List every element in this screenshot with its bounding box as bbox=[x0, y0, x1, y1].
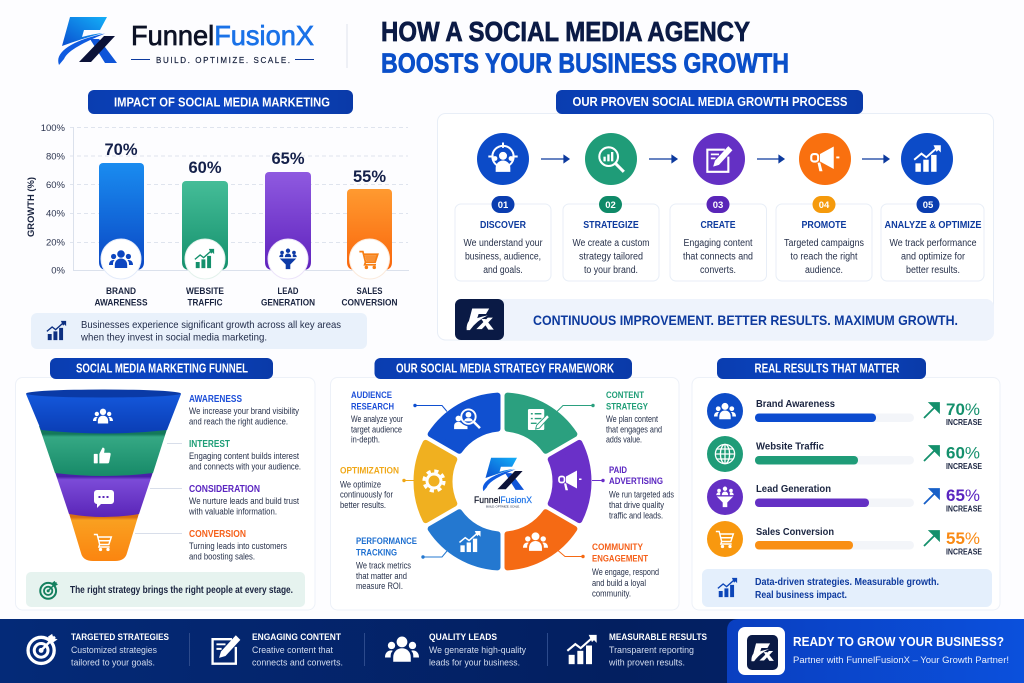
footer bar bbox=[0, 619, 1024, 683]
stage text: interest bbox=[189, 439, 301, 472]
ring segment: community engagement bbox=[508, 512, 574, 567]
step 03: create bbox=[670, 133, 766, 281]
label: content strategy: CONTENT bbox=[606, 390, 644, 401]
label: community engagement: community. bbox=[592, 588, 631, 598]
label: content strategy: We plan content bbox=[606, 414, 658, 424]
label: performance tracking: PERFORMANCE bbox=[356, 536, 417, 547]
bar: sales conversion 55% bbox=[342, 168, 398, 308]
callout: chart summary: Businesses experience significant growth across all key areas bbox=[81, 319, 341, 331]
funnel stage 1: awareness shape bbox=[26, 394, 181, 434]
bar: lead generation 65%: GENERATION bbox=[261, 298, 315, 308]
title: BOOSTS YOUR BUSINESS GROWTH bbox=[381, 48, 789, 78]
label: audience research: RESEARCH bbox=[351, 402, 394, 412]
stage text: awareness: We increase your brand visibility bbox=[189, 406, 299, 416]
bar: website traffic 60%: 60% bbox=[188, 159, 222, 177]
y axis labels: 60% bbox=[46, 180, 66, 191]
label: optimization bbox=[340, 466, 399, 510]
callout: data-driven strategies: Data-driven strategies. Measurable growth. bbox=[755, 577, 939, 588]
step 02: strategize: STRATEGIZE bbox=[583, 219, 639, 231]
label: content strategy bbox=[606, 390, 662, 444]
heading: strategy framework: OUR SOCIAL MEDIA STRATEGY FRAMEWORK bbox=[396, 362, 614, 376]
arrow: strategize to create bbox=[649, 156, 677, 162]
bar: brand awareness 70%: BRAND bbox=[106, 286, 136, 296]
step 02: strategize: to your brand. bbox=[584, 265, 638, 276]
heading: growth process: OUR PROVEN SOCIAL MEDIA GROWTH PROCESS bbox=[572, 95, 848, 109]
bar: brand awareness 70% bbox=[94, 141, 148, 308]
icon: shopping cart bbox=[94, 534, 111, 551]
step 02: strategize: We create a custom bbox=[572, 238, 650, 249]
banner: continuous improvement: CONTINUOUS IMPROVEMENT. BETTER RESULTS. MAXIMUM GROWTH. bbox=[533, 312, 958, 328]
label: community engagement bbox=[592, 542, 659, 598]
ring segment: content strategy bbox=[508, 396, 574, 451]
step 03: create: Engaging content bbox=[684, 238, 753, 249]
heading: real results: REAL RESULTS THAT MATTER bbox=[754, 362, 900, 376]
call to action: Partner with FunnelFusionX – Your Growth Partner! bbox=[793, 655, 1009, 666]
callout: data-driven strategies: Real business impact. bbox=[755, 590, 847, 601]
center logo: BUILD. OPTIMIZE. SCALE. bbox=[486, 504, 520, 508]
step 02: strategize: 02 bbox=[605, 200, 616, 211]
stage text: interest: and connects with your audience. bbox=[189, 462, 301, 472]
label: paid advertising: PAID bbox=[609, 465, 627, 476]
bar: website traffic 60% bbox=[182, 159, 228, 308]
y axis labels: 40% bbox=[46, 208, 66, 220]
stage text: interest: INTEREST bbox=[189, 439, 230, 450]
label: audience research bbox=[351, 390, 403, 444]
label: optimization: continuously for bbox=[340, 490, 393, 500]
bar: lead generation 65%: LEAD bbox=[278, 286, 299, 296]
ring segment: audience research bbox=[431, 396, 498, 451]
arrow: discover to strategize bbox=[541, 156, 569, 162]
stage text: conversion bbox=[189, 529, 287, 562]
title bbox=[381, 16, 789, 78]
label: paid advertising: that drive quality bbox=[609, 500, 664, 510]
result row: lead generation: INCREASE bbox=[946, 504, 983, 514]
result row: sales conversion: INCREASE bbox=[946, 548, 983, 556]
step 01: discover: 01 bbox=[498, 200, 509, 211]
step 01: discover: DISCOVER bbox=[480, 219, 526, 231]
step 04: promote: audience. bbox=[805, 265, 843, 276]
result row: sales conversion: 55% bbox=[946, 529, 980, 548]
bar: sales conversion 55%: CONVERSION bbox=[342, 298, 398, 308]
step 05: analyze and optimize: better results. bbox=[906, 265, 960, 276]
benefit: measurable results: Transparent reporting bbox=[609, 645, 694, 655]
label: community engagement: and build a loyal bbox=[592, 578, 646, 588]
benefit: targeted strategies bbox=[28, 632, 169, 668]
result row: brand awareness: Brand Awareness bbox=[756, 399, 835, 410]
callout: right strategy bbox=[26, 572, 305, 607]
label: optimization: better results. bbox=[340, 500, 386, 510]
step 03: create: 03 bbox=[713, 200, 723, 211]
callout: chart summary bbox=[31, 313, 367, 349]
connector lines bbox=[404, 406, 603, 557]
ring segment: performance tracking bbox=[431, 512, 498, 567]
bar: website traffic 60%: TRAFFIC bbox=[188, 298, 223, 308]
ring segment: optimization bbox=[416, 443, 454, 520]
call to action: READY TO GROW YOUR BUSINESS? bbox=[793, 635, 1004, 649]
step 01: discover: We understand your bbox=[464, 238, 543, 249]
step 04: promote: 04 bbox=[819, 200, 830, 211]
result row: website traffic bbox=[707, 436, 983, 472]
y axis labels: 0% bbox=[51, 266, 66, 276]
label: paid advertising: We run targeted ads bbox=[609, 490, 674, 500]
bar chart: growth by area bbox=[26, 123, 409, 308]
label: community engagement: We engage, respond bbox=[592, 567, 659, 577]
step 03: create: CREATE bbox=[700, 219, 736, 231]
heading: marketing funnel: SOCIAL MEDIA MARKETING FUNNEL bbox=[76, 362, 248, 376]
result row: sales conversion: Sales Conversion bbox=[756, 527, 834, 538]
ring segment: paid advertising bbox=[551, 443, 589, 520]
stage text: interest: Engaging content builds interest bbox=[189, 451, 299, 461]
brand tagline: BUILD. OPTIMIZE. SCALE. bbox=[156, 56, 290, 65]
call to action bbox=[727, 619, 1024, 683]
panel: growth process bbox=[438, 114, 994, 340]
step 04: promote bbox=[776, 133, 872, 281]
label: audience research: target audience bbox=[351, 424, 402, 434]
y axis labels: 20% bbox=[46, 238, 66, 248]
brand name: FunnelFusionX bbox=[131, 20, 314, 51]
benefit: engaging content bbox=[213, 632, 343, 668]
funnel stage 4: conversion shape bbox=[68, 510, 140, 561]
bar: brand awareness 70%: AWARENESS bbox=[94, 298, 148, 308]
step 04: promote: to reach the right bbox=[790, 252, 858, 262]
result row: website traffic: 60% bbox=[946, 444, 980, 462]
label: content strategy: that engages and bbox=[606, 424, 662, 434]
label: content strategy: adds value. bbox=[606, 434, 642, 444]
heading: marketing funnel bbox=[50, 358, 273, 379]
step 03: create: that connects and bbox=[683, 252, 753, 262]
result row: lead generation: 65% bbox=[946, 486, 980, 505]
step 01: discover bbox=[455, 133, 551, 281]
result row: brand awareness: INCREASE bbox=[946, 418, 983, 427]
benefit: quality leads: leads for your business. bbox=[429, 658, 520, 668]
step 05: analyze and optimize: ANALYZE & OPTIMIZE bbox=[884, 219, 982, 231]
label: performance tracking: measure ROI. bbox=[356, 581, 403, 591]
benefit: targeted strategies: Customized strategies bbox=[71, 645, 157, 655]
benefit: measurable results: with proven results. bbox=[608, 658, 685, 668]
stage text: consideration bbox=[188, 484, 299, 516]
icon: audience bbox=[93, 409, 113, 424]
step 02: strategize bbox=[563, 133, 659, 281]
stage text: conversion: and boosting sales. bbox=[189, 552, 255, 562]
benefit: engaging content: connects and converts. bbox=[252, 658, 343, 668]
result row: website traffic: Website Traffic bbox=[756, 442, 824, 452]
callout: right strategy: The right strategy brings the right people at every stage. bbox=[70, 585, 293, 596]
label: audience research: AUDIENCE bbox=[351, 390, 392, 401]
benefit: measurable results bbox=[567, 632, 707, 668]
panel: strategy framework bbox=[330, 378, 679, 610]
label: audience research: We analyze your bbox=[351, 414, 403, 424]
label: content strategy: STRATEGY bbox=[606, 402, 649, 412]
icon: FX logo mark bbox=[58, 17, 117, 65]
step 01: discover: and goals. bbox=[483, 265, 523, 276]
bar: sales conversion 55%: SALES bbox=[356, 286, 382, 296]
label: performance tracking: TRACKING bbox=[356, 548, 397, 558]
step 01: discover: business, audience, bbox=[465, 252, 541, 262]
funnel stage 3: consideration shape bbox=[54, 469, 154, 517]
banner: continuous improvement bbox=[455, 299, 994, 340]
bar: website traffic 60%: WEBSITE bbox=[186, 286, 224, 296]
arrow: promote to analyze bbox=[862, 156, 889, 162]
result row: brand awareness: 70% bbox=[946, 400, 980, 419]
benefit: measurable results: MEASURABLE RESULTS bbox=[609, 632, 707, 642]
benefit: targeted strategies: tailored to your goals. bbox=[71, 658, 155, 668]
funnel stage 2: interest shape bbox=[39, 426, 168, 476]
bar: lead generation 65% bbox=[261, 150, 315, 308]
icon: thumbs up bbox=[94, 448, 111, 463]
stage text: consideration: We nurture leads and build trust bbox=[189, 496, 299, 506]
bar: sales conversion 55%: 55% bbox=[353, 168, 386, 186]
panel: marketing funnel bbox=[16, 378, 315, 610]
label: community engagement: COMMUNITY bbox=[592, 542, 644, 553]
label: audience research: in-depth. bbox=[351, 434, 380, 444]
step 05: analyze and optimize bbox=[881, 133, 984, 281]
stage text: awareness bbox=[189, 394, 299, 426]
panel: real results bbox=[692, 378, 1000, 610]
bar: lead generation 65%: 65% bbox=[271, 150, 305, 168]
stage text: consideration: CONSIDERATION bbox=[189, 484, 260, 495]
y axis title: GROWTH (%) bbox=[26, 177, 36, 237]
step 03: create: converts. bbox=[700, 265, 736, 276]
title: HOW A SOCIAL MEDIA AGENCY bbox=[381, 16, 750, 47]
label: performance tracking bbox=[356, 536, 417, 591]
label: community engagement: ENGAGEMENT bbox=[592, 554, 648, 564]
step 04: promote: PROMOTE bbox=[802, 219, 846, 231]
heading: growth process bbox=[556, 90, 863, 114]
step 05: analyze and optimize: and optimize for bbox=[901, 252, 966, 262]
step 02: strategize: strategy tailored bbox=[579, 252, 643, 262]
result row: lead generation: Lead Generation bbox=[756, 484, 831, 495]
y axis labels bbox=[41, 123, 66, 276]
label: performance tracking: We track metrics bbox=[356, 560, 411, 570]
benefit: engaging content: ENGAGING CONTENT bbox=[252, 632, 341, 642]
callout: chart summary: when they invest in social media marketing. bbox=[80, 332, 267, 344]
stage text: conversion: CONVERSION bbox=[189, 529, 246, 540]
bar: brand awareness 70%: 70% bbox=[104, 141, 138, 159]
stage text: awareness: and reach the right audience. bbox=[189, 416, 288, 426]
heading: impact of social media marketing: IMPACT OF SOCIAL MEDIA MARKETING bbox=[114, 96, 330, 110]
step 05: analyze and optimize: We track performance bbox=[890, 238, 977, 249]
stage text: consideration: with valuable information. bbox=[188, 506, 277, 516]
funnel rim bbox=[26, 390, 181, 398]
stage text: conversion: Turning leads into customers bbox=[189, 541, 287, 551]
center logo: FunnelFusionX bbox=[474, 495, 532, 505]
stage text: awareness: AWARENESS bbox=[189, 394, 242, 405]
callout: data-driven strategies bbox=[702, 569, 992, 607]
benefit: quality leads bbox=[385, 632, 526, 668]
center logo bbox=[474, 458, 532, 508]
arrow: create to promote bbox=[757, 156, 784, 162]
connector dots bbox=[402, 404, 605, 559]
heading: strategy framework bbox=[374, 358, 632, 379]
result row: lead generation bbox=[707, 479, 983, 515]
benefit: quality leads: QUALITY LEADS bbox=[429, 632, 497, 642]
label: paid advertising bbox=[609, 465, 674, 520]
result row: website traffic: INCREASE bbox=[946, 462, 983, 471]
y axis labels: 80% bbox=[46, 152, 66, 162]
y axis labels: 100% bbox=[41, 123, 66, 134]
brand logo bbox=[58, 17, 314, 65]
step 04: promote: Targeted campaigns bbox=[784, 238, 864, 249]
result row: brand awareness bbox=[707, 393, 983, 429]
benefit: targeted strategies: TARGETED STRATEGIES bbox=[71, 632, 169, 642]
icon: chat bubble bbox=[94, 490, 114, 508]
benefit: engaging content: Creative content that bbox=[252, 645, 333, 655]
label: paid advertising: ADVERTISING bbox=[609, 476, 663, 487]
step 05: analyze and optimize: 05 bbox=[923, 200, 934, 211]
heading: impact of social media marketing bbox=[88, 90, 353, 114]
label: paid advertising: traffic and leads. bbox=[609, 510, 663, 520]
label: optimization: OPTIMIZATION bbox=[340, 466, 399, 476]
heading: real results bbox=[717, 358, 926, 379]
label: performance tracking: that matter and bbox=[356, 571, 407, 581]
benefit: quality leads: We generate high-quality bbox=[429, 645, 526, 655]
result row: sales conversion bbox=[707, 521, 983, 557]
label: optimization: We optimize bbox=[340, 480, 381, 490]
